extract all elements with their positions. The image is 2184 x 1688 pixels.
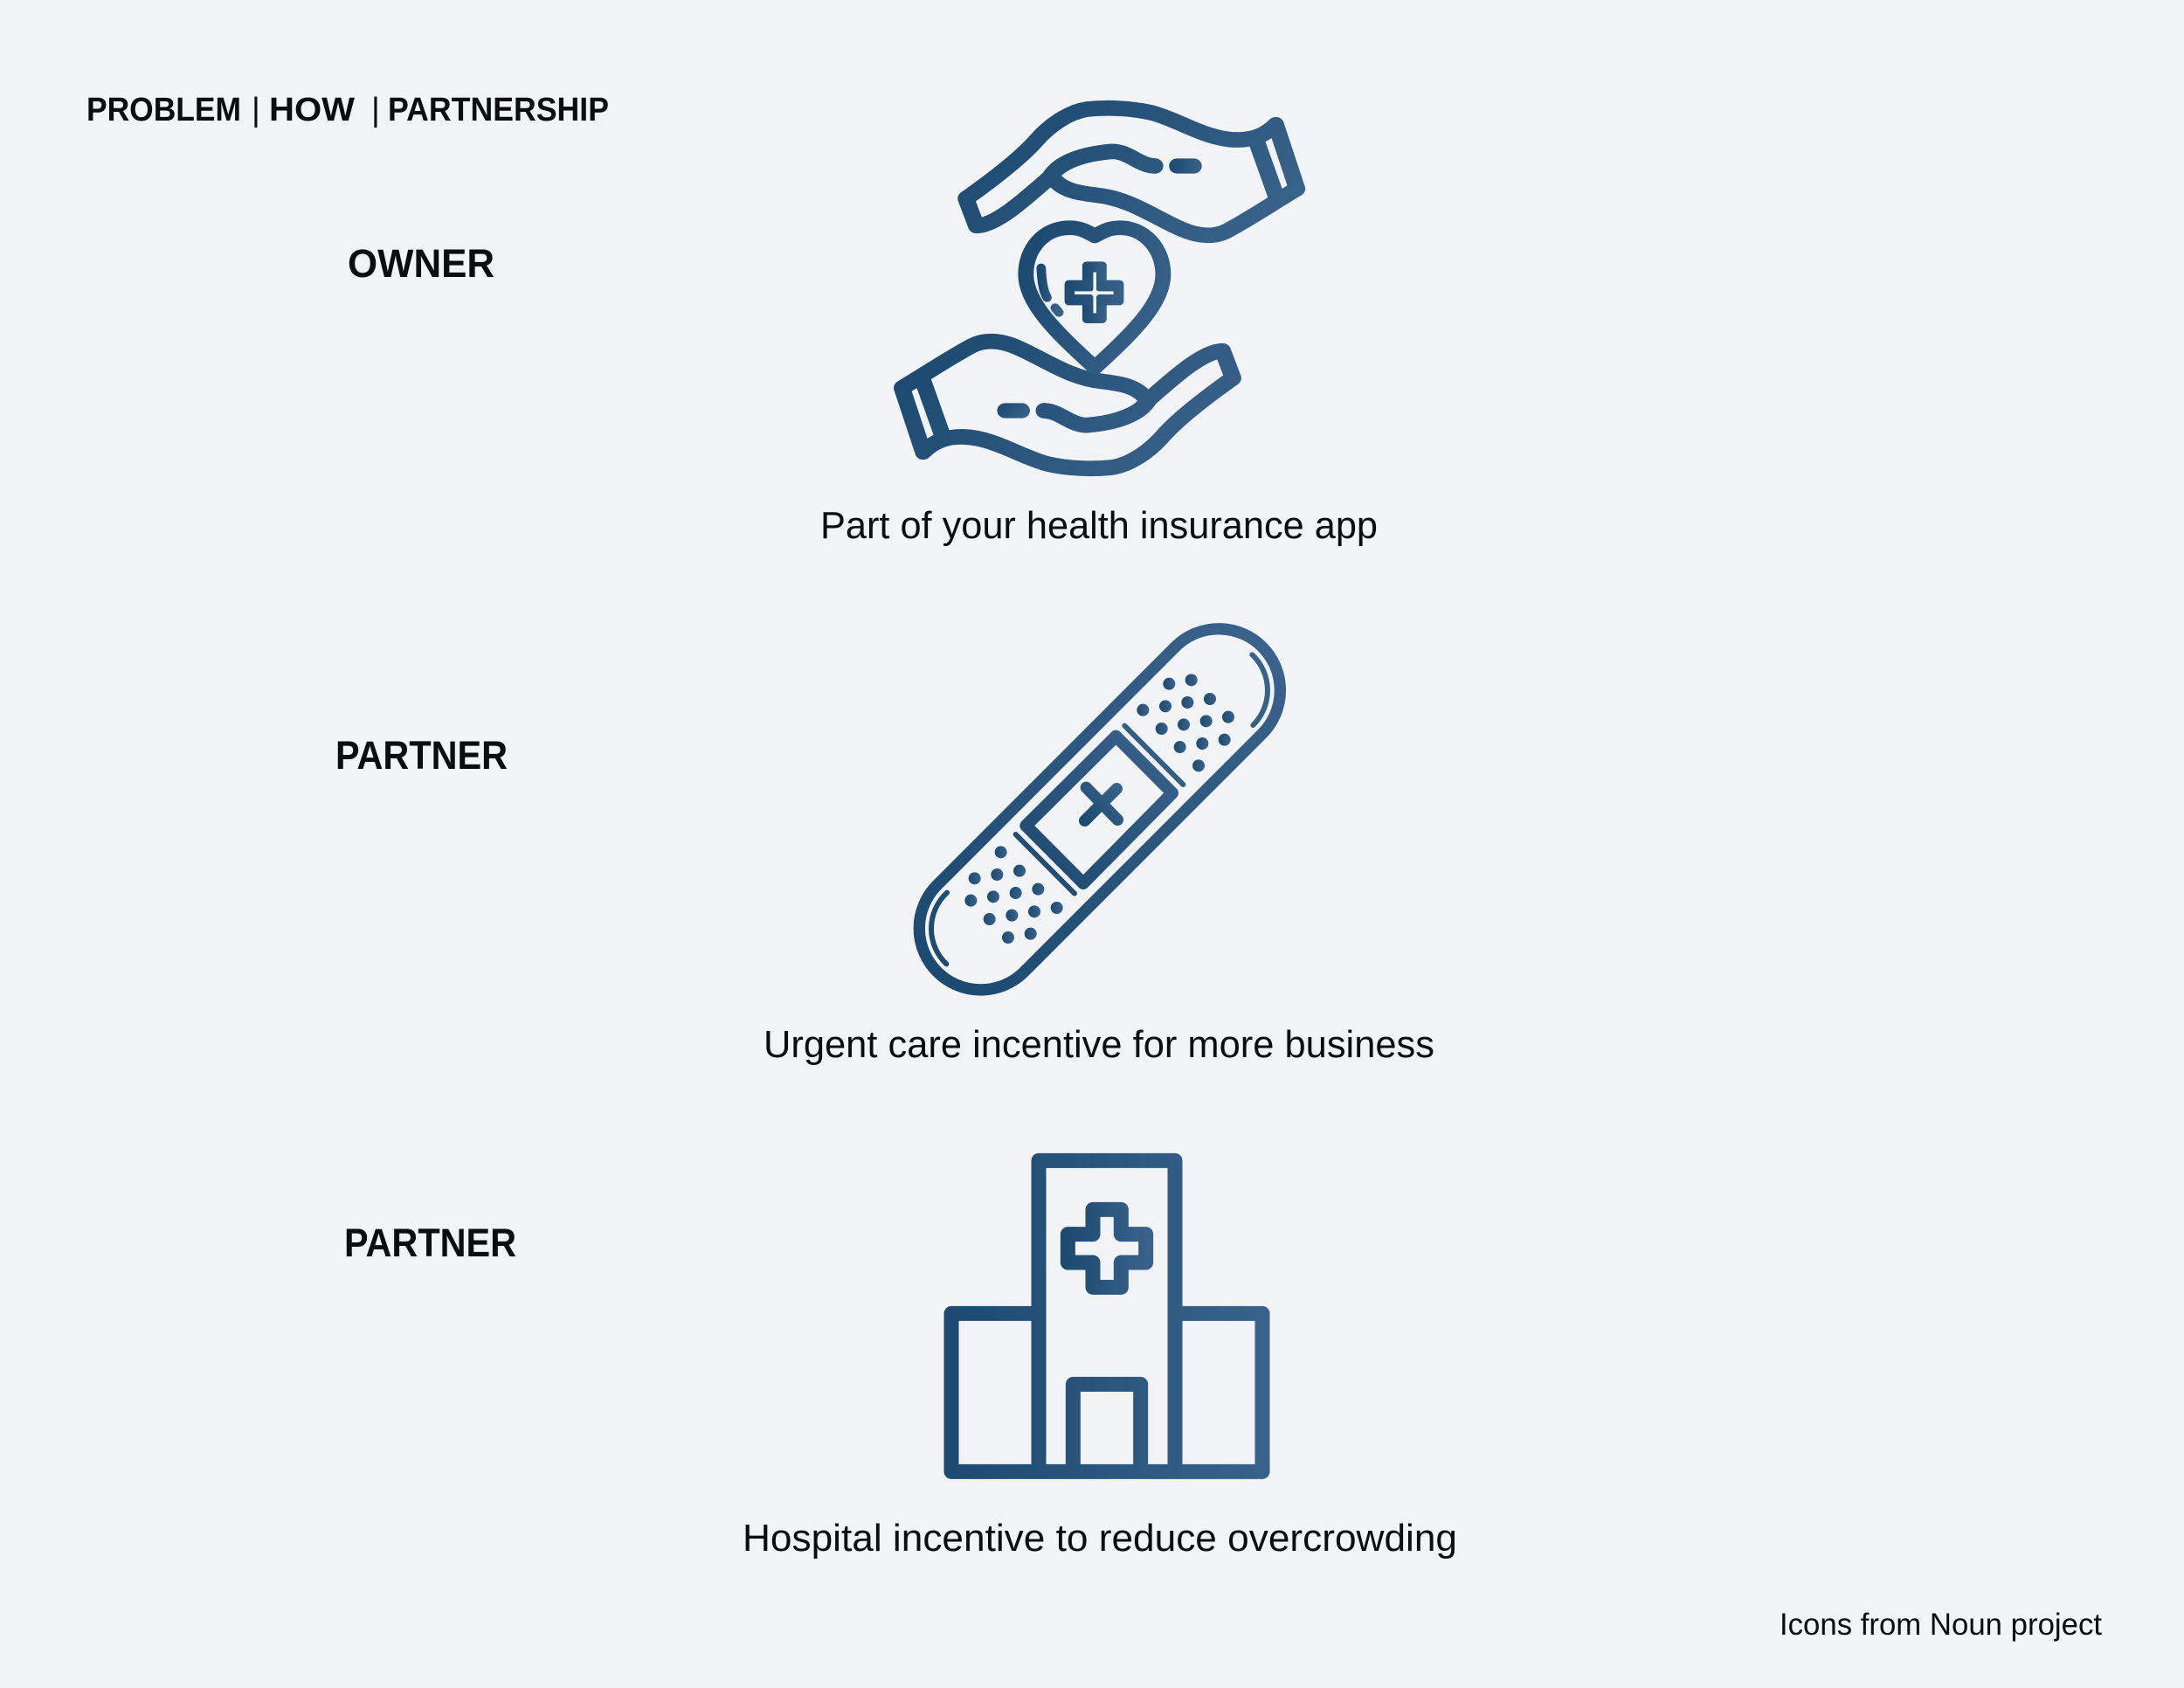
caption: urgent care: Urgent care incentive for more business [764, 1023, 1434, 1066]
perforation dots [964, 674, 1234, 944]
lower hand [902, 342, 1233, 468]
icon: bandage [894, 604, 1306, 1015]
medical cross in heart [1065, 261, 1123, 323]
label: partner hospital: PARTNER [344, 1221, 516, 1265]
label: partner urgent care: PARTNER [335, 733, 508, 778]
credit: icons source: Icons from Noun project [1780, 1608, 2102, 1642]
bandage outline [894, 604, 1306, 1015]
title: problem how partnership: | [371, 92, 380, 128]
icon: hands holding heart [902, 108, 1297, 468]
hospital cross [1068, 1209, 1146, 1287]
pad side lines [1016, 726, 1183, 894]
upper hand [966, 108, 1297, 235]
caption: health insurance app: Part of your health insurance app [820, 504, 1378, 547]
title: problem how partnership: HOW [269, 92, 355, 128]
heart [1026, 228, 1163, 368]
icon: hospital [951, 1160, 1262, 1471]
title: problem how partnership: PARTNERSHIP [388, 92, 609, 128]
label: owner: OWNER [348, 241, 494, 286]
center pad [1026, 737, 1172, 883]
title: problem how partnership [86, 92, 609, 128]
caption: hospital: Hospital incentive to reduce overcrowding [743, 1517, 1457, 1560]
end arcs [931, 654, 1268, 964]
cross on pad [1085, 787, 1117, 820]
title: problem how partnership: PROBLEM [86, 92, 241, 128]
title: problem how partnership: | [252, 92, 260, 128]
hospital building [951, 1160, 1262, 1471]
